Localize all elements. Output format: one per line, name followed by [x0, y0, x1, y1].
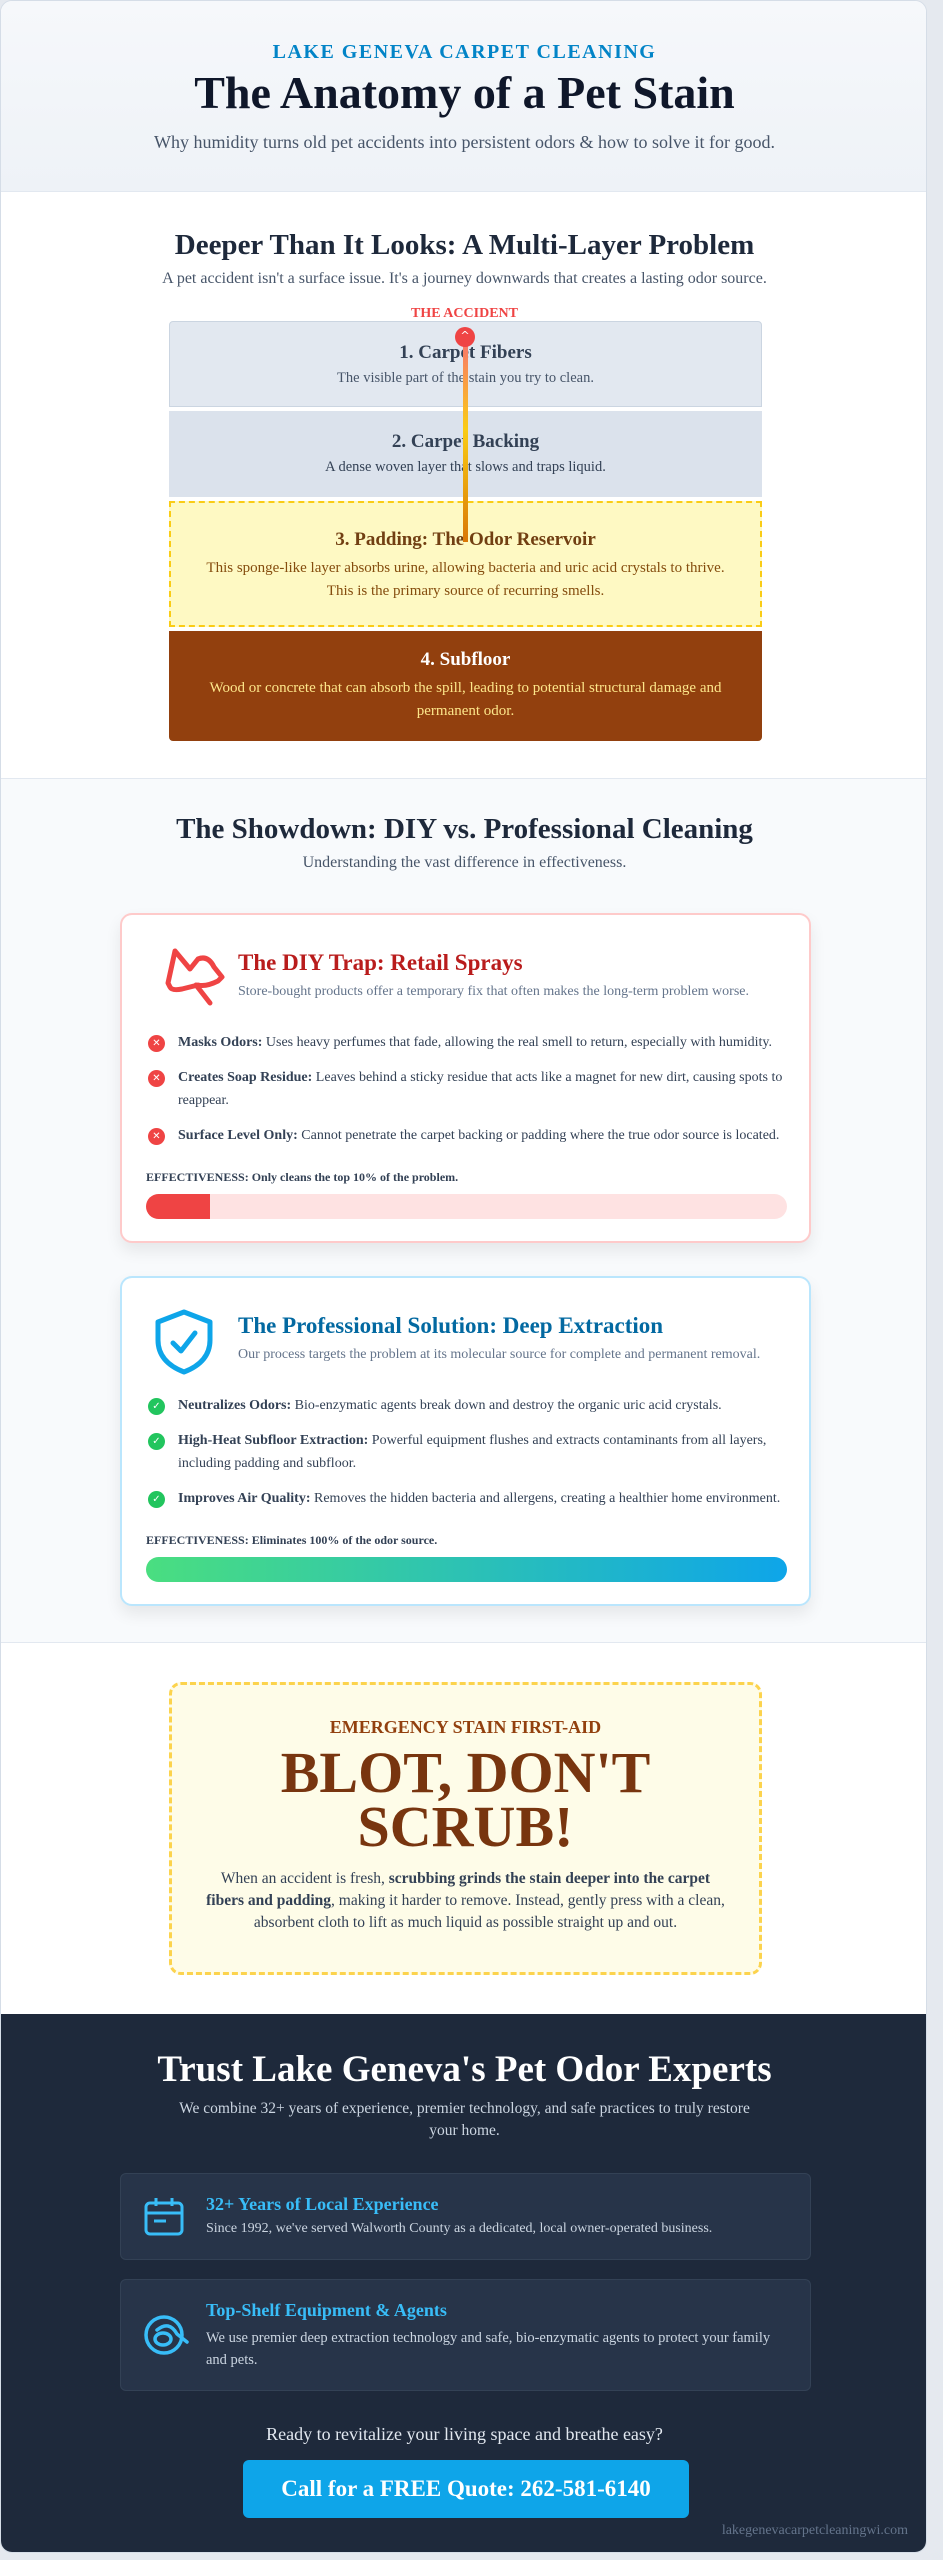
- section subtitle: Understanding the vast difference in effectiveness.: [303, 854, 626, 871]
- list: benefits: High-Heat Subfloor Extraction: Powerful equipment flushes and extracts contaminants from all layers, including padding and subfloor.: [178, 1433, 766, 1471]
- list: drawbacks: ✕: [152, 1073, 161, 1084]
- bar: DIY effectiveness: [146, 1194, 787, 1219]
- subtitle: Why humidity turns old pet accidents into persistent odors & how to solve it for good.: [154, 132, 775, 152]
- card: equipment: [120, 2279, 811, 2391]
- callout label: EMERGENCY STAIN FIRST-AID: [330, 1717, 601, 1737]
- cta button: Call for a FREE Quote: 262-581-6140: [281, 2476, 651, 2501]
- list: benefits: ✓: [152, 1494, 161, 1505]
- layer 1: [169, 321, 762, 407]
- card description: Our process targets the problem at its molecular source for complete and permanent removal.: [238, 1347, 760, 1362]
- card title: The Professional Solution: Deep Extraction: [238, 1313, 663, 1338]
- callout headline: SCRUB!: [358, 1794, 573, 1859]
- layer 3: [169, 501, 762, 627]
- icon: shield check: [156, 1310, 212, 1374]
- cta button: [243, 2460, 689, 2518]
- card title: 32+ Years of Local Experience: [206, 2194, 439, 2214]
- card: experience: [120, 2173, 811, 2260]
- list: drawbacks: [148, 1035, 782, 1145]
- card: DIY: [120, 913, 811, 1243]
- panel: showdown: [1, 779, 928, 1643]
- trust subtitle: We combine 32+ years of experience, premier technology, and safe practices to truly restore your home.: [179, 2100, 750, 2139]
- list: benefits: [148, 1398, 780, 1508]
- layer 3: 3. Padding: The Odor Reservoir: [335, 529, 596, 550]
- layer 2: [169, 411, 762, 497]
- section subtitle: A pet accident isn't a surface issue. It's a journey downwards that creates a lasting odor source.: [162, 270, 767, 287]
- icon: broken spray: [166, 948, 225, 1006]
- card text: We use premier deep extraction technology and safe, bio-enzymatic agents to protect your family and pets.: [206, 2330, 770, 2368]
- list: benefits: ✓: [152, 1401, 161, 1412]
- layer 1: 1. Carpet Fibers: [399, 342, 532, 363]
- arrow: seepage path: [455, 327, 475, 542]
- list: drawbacks: ✕: [152, 1131, 161, 1142]
- card: professional: [120, 1276, 811, 1606]
- list: drawbacks: Masks Odors: Uses heavy perfumes that fade, allowing the real smell to return, especially with humidity.: [178, 1035, 772, 1050]
- list: benefits: ✓: [152, 1436, 161, 1447]
- icon: equipment: [144, 2315, 189, 2355]
- layer 4: 4. Subfloor: [421, 649, 510, 670]
- section heading: Deeper Than It Looks: A Multi-Layer Problem: [175, 229, 754, 261]
- layer 3: This sponge-like layer absorbs urine, allowing bacteria and uric acid crystals to thrive. This is the primary source of recurring smells.: [206, 560, 725, 599]
- list: benefits: Improves Air Quality: Removes the hidden bacteria and allergens, creating a healthier home environment.: [178, 1491, 780, 1506]
- callout text: When an accident is fresh, scrubbing grinds the stain deeper into the carpet fibers and padding, making it harder to remove. Instead, gently press with a clean, absorbent cloth to lift as much liquid as possible straight up and out.: [206, 1870, 725, 1931]
- section heading: The Showdown: DIY vs. Professional Cleaning: [176, 813, 753, 845]
- callout headline: [281, 1740, 650, 1859]
- list: drawbacks: ✕: [152, 1038, 161, 1049]
- callout box: [169, 1682, 762, 1975]
- layer 4: Wood or concrete that can absorb the spill, leading to potential structural damage and permanent odor.: [210, 680, 721, 719]
- layer 2: 2. Carpet Backing: [392, 431, 539, 452]
- panel: trust: [1, 2014, 928, 2554]
- card title: Top-Shelf Equipment & Agents: [206, 2300, 447, 2320]
- icon: calendar: [144, 2198, 184, 2236]
- card description: Store-bought products offer a temporary fix that often makes the long-term problem worse.: [238, 984, 749, 999]
- trust heading: Trust Lake Geneva's Pet Odor Experts: [157, 2049, 772, 2090]
- cta prompt: Ready to revitalize your living space and breathe easy?: [266, 2424, 663, 2444]
- card title: The DIY Trap: Retail Sprays: [238, 950, 523, 975]
- accident label: THE ACCIDENT: [411, 306, 518, 321]
- effectiveness label: EFFECTIVENESS: Only cleans the top 10% of the problem.: [146, 1170, 458, 1184]
- panel: first aid: [1, 1643, 928, 2014]
- list: drawbacks: Creates Soap Residue: Leaves behind a sticky residue that acts like a magnet for new dirt, causing spots to reappear.: [178, 1070, 782, 1108]
- title: The Anatomy of a Pet Stain: [194, 67, 735, 118]
- bar: pro effectiveness: [146, 1557, 787, 1582]
- header: [1, 1, 928, 192]
- arrow: seepage path: ^: [460, 329, 470, 342]
- footer url: lakegenevacarpetcleaningwi.com: [722, 2523, 908, 2538]
- list: benefits: Neutralizes Odors: Bio-enzymatic agents break down and destroy the organic uric acid crystals.: [178, 1398, 722, 1413]
- panel: layers: [1, 192, 928, 779]
- layer 4: [169, 631, 762, 741]
- card text: Since 1992, we've served Walworth County as a dedicated, local owner-operated business.: [206, 2221, 712, 2236]
- layer 1: The visible part of the stain you try to clean.: [337, 370, 594, 386]
- brand label: LAKE GENEVA CARPET CLEANING: [273, 41, 656, 63]
- list: drawbacks: Surface Level Only: Cannot penetrate the carpet backing or padding where the true odor source is located.: [178, 1128, 779, 1143]
- effectiveness label: EFFECTIVENESS: Eliminates 100% of the odor source.: [146, 1533, 437, 1547]
- callout headline: BLOT, DON'T: [281, 1740, 650, 1805]
- layer 2: A dense woven layer that slows and traps liquid.: [325, 459, 606, 475]
